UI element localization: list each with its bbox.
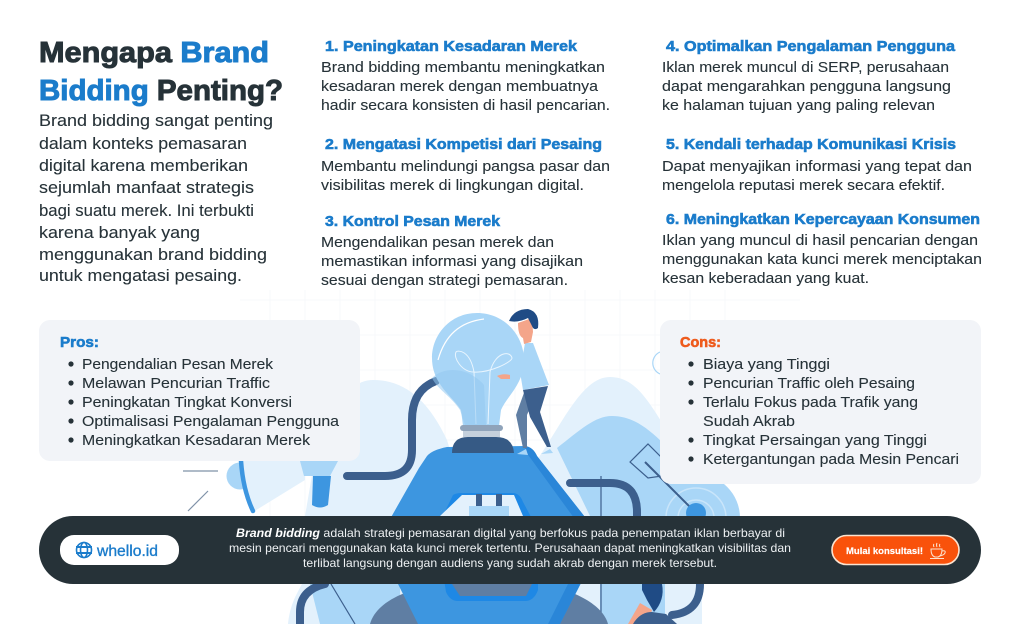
benefit 1: Brand bidding membantu meningkatkan <box>321 59 605 76</box>
grey dome <box>370 584 608 624</box>
benefit 6: 6. Meningkatkan Kepercayaan Konsumen <box>666 211 980 228</box>
title <box>39 37 283 107</box>
benefit 6: Iklan yang muncul di hasil pencarian dengan <box>662 232 978 249</box>
panel: cons: Tingkat Persaingan yang Tinggi <box>703 432 927 449</box>
title: Mengapa Brand <box>39 37 269 69</box>
panel: cons: Terlalu Fokus pada Trafik yang <box>703 394 918 411</box>
footer description: terlibat langsung dengan audiens yang sudah akrab dengan merek tersebut. <box>303 557 717 570</box>
benefit 3: Mengendalikan pesan merek dan <box>321 234 554 251</box>
panel: cons: Biaya yang Tinggi <box>703 356 830 373</box>
lightbulb <box>432 313 524 453</box>
person on platform <box>497 309 553 455</box>
logo pill <box>60 535 179 565</box>
benefit 6: menggunakan kata kunci merek menciptakan <box>662 251 982 268</box>
footer description: mesin pencari menggunakan kata kunci merek tertentu. Perusahaan dapat meningkatkan visibilitas dan <box>229 542 791 555</box>
benefit 1: hadir secara konsisten di hasil pencarian. <box>321 97 610 114</box>
intro paragraph: untuk mengatasi pesaing. <box>39 266 242 285</box>
benefit 1: kesadaran merek dengan membuatnya <box>321 78 599 95</box>
benefit 4 <box>662 38 956 114</box>
intro paragraph: karena banyak yang <box>39 223 200 242</box>
benefit 6: kesan keberadaan yang kuat. <box>662 270 869 287</box>
footer description: Brand bidding adalah strategi pemasaran digital yang berfokus pada penempatan iklan berbayar di <box>236 527 785 540</box>
panel: cons <box>660 320 981 484</box>
logo pill: whello.id <box>96 543 158 560</box>
benefit 1: 1. Peningkatan Kesadaran Merek <box>325 38 578 55</box>
benefit 4: Iklan merek muncul di SERP, perusahaan <box>662 59 949 76</box>
panel: cons: Ketergantungan pada Mesin Pencari <box>703 451 959 468</box>
panel: pros <box>39 320 360 461</box>
panel: pros: Peningkatan Tingkat Konversi <box>82 394 292 411</box>
target and arrow <box>331 352 740 624</box>
benefit 5: Dapat menyajikan informasi yang tepat dan <box>662 158 972 175</box>
panel: cons: Pencurian Traffic oleh Pesaing <box>703 375 915 392</box>
benefit 3: memastikan informasi yang disajikan <box>321 253 583 270</box>
person at bottom <box>628 584 677 624</box>
benefit 5 <box>662 136 972 194</box>
benefit 5: 5. Kendali terhadap Komunikasi Krisis <box>666 136 956 153</box>
panel: pros: Pengendalian Pesan Merek <box>82 356 274 373</box>
benefit 1 <box>321 38 610 114</box>
illustration: lightbulb scene <box>183 309 740 624</box>
footer description <box>229 527 791 570</box>
benefit 2: 2. Mengatasi Kompetisi dari Pesaing <box>325 136 602 153</box>
intro paragraph: digital karena memberikan <box>39 156 248 175</box>
benefit 4: dapat mengarahkan pengguna langsung <box>662 78 951 95</box>
panel: pros: Optimalisasi Pengalaman Pengguna <box>82 413 340 430</box>
hexagon platform <box>377 446 603 624</box>
cables <box>300 381 700 624</box>
benefit 6 <box>662 211 982 287</box>
intro paragraph: dalam konteks pemasaran <box>39 134 247 153</box>
megaphone <box>183 461 338 512</box>
title: Bidding Penting? <box>39 75 283 107</box>
benefit 2: Membantu melindungi pangsa pasar dan <box>321 158 610 175</box>
intro paragraph: bagi suatu merek. Ini terbukti <box>39 201 254 220</box>
footer bar <box>39 516 981 584</box>
panel: pros: Pros: <box>60 334 99 351</box>
intro paragraph: menggunakan brand bidding <box>39 245 267 264</box>
background hills <box>288 377 702 624</box>
benefit 2 <box>321 136 610 194</box>
panel: pros: Melawan Pencurian Traffic <box>82 375 271 392</box>
panel: cons: Sudah Akrab <box>703 413 795 430</box>
icon: coffee cup <box>930 543 945 558</box>
benefit 5: mengelola reputasi merek secara efektif. <box>662 177 945 194</box>
panel: pros: Meningkatkan Kesadaran Merek <box>82 432 311 449</box>
intro paragraph: Brand bidding sangat penting <box>39 111 273 130</box>
intro paragraph: sejumlah manfaat strategis <box>39 178 254 197</box>
panel: cons: Cons: <box>680 334 721 351</box>
button <box>832 536 959 564</box>
button: Mulai konsultasi! <box>846 546 923 557</box>
benefit 3 <box>321 213 583 289</box>
benefit 2: visibilitas merek di lingkungan digital. <box>321 177 584 194</box>
benefit 3: sesuai dengan strategi pemasaran. <box>321 272 568 289</box>
benefit 3: 3. Kontrol Pesan Merek <box>325 213 501 230</box>
benefit 4: ke halaman tujuan yang paling relevan <box>662 97 935 114</box>
intro paragraph <box>39 111 273 285</box>
benefit 4: 4. Optimalkan Pengalaman Pengguna <box>666 38 956 55</box>
